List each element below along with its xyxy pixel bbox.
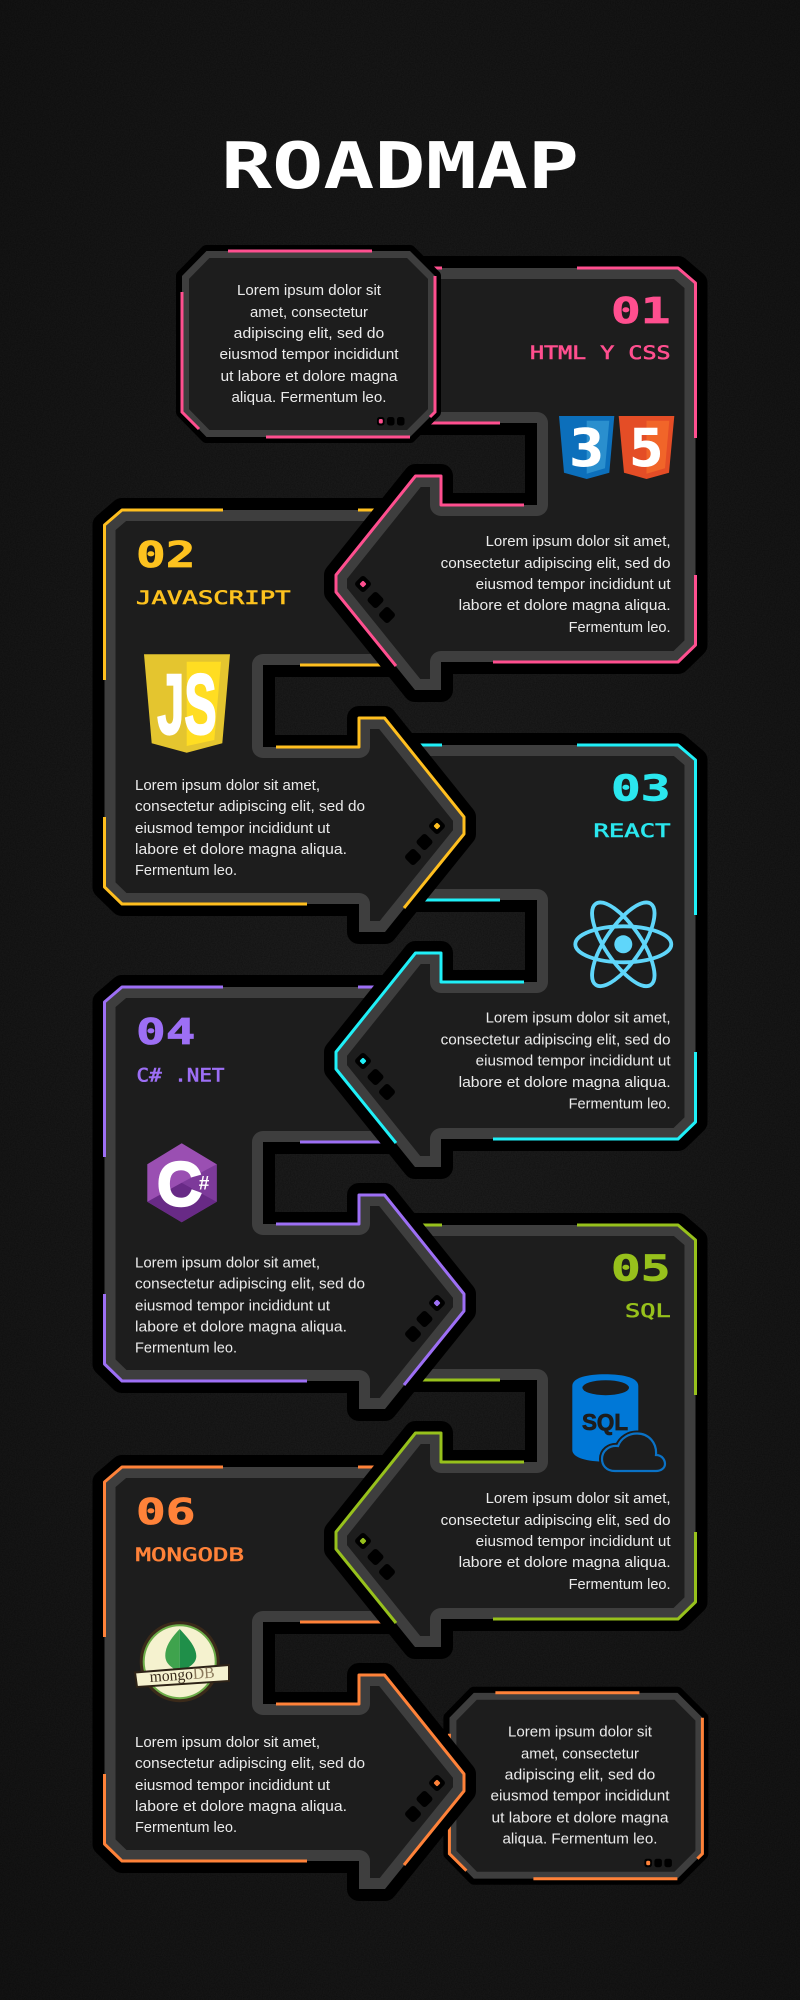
icon: JS shield: JS xyxy=(157,657,217,752)
panel 03 text: eiusmod tempor incididunt ut xyxy=(476,1052,671,1070)
icon: HTML5 shield: 5 xyxy=(629,419,664,480)
icon: HTML5 shield xyxy=(619,416,674,480)
opening card text: Lorem ipsum dolor sit xyxy=(237,282,382,299)
panel 06 text: Lorem ipsum dolor sit amet, xyxy=(135,1734,320,1751)
opening card text: eiusmod tempor incididunt xyxy=(220,346,399,363)
label SQL: SQL xyxy=(625,1301,671,1322)
panel 03: React xyxy=(336,745,696,1167)
panel 01 text: Lorem ipsum dolor sit amet, xyxy=(486,533,671,550)
panel 01 text: Fermentum leo. xyxy=(569,619,671,636)
icon: C sharp: # xyxy=(199,1174,210,1194)
icon: CSS3 shield: 3 xyxy=(569,419,604,480)
panel 02 text: Fermentum leo. xyxy=(135,862,237,879)
number 01: 01 xyxy=(611,291,670,332)
opening card text: ut labore et dolore magna xyxy=(220,368,398,385)
panel 06 text: Fermentum leo. xyxy=(135,1819,237,1836)
closing card text: ut labore et dolore magna xyxy=(492,1810,669,1827)
icon: C sharp xyxy=(147,1143,217,1222)
panel 02: JavaScript xyxy=(104,510,464,932)
opening card xyxy=(182,251,435,437)
icon: MongoDB: mongoDB xyxy=(149,1664,215,1686)
panel 01 text: consectetur adipiscing elit, sed do xyxy=(441,555,671,572)
opening card text: aliqua. Fermentum leo. xyxy=(232,389,386,406)
opening card text: amet, consectetur xyxy=(250,304,368,321)
icon: SQL database with cloud xyxy=(572,1374,665,1471)
panel 04: C# .NET xyxy=(104,987,464,1409)
panel 04 text: Lorem ipsum dolor sit amet, xyxy=(135,1254,320,1272)
icon: React atom xyxy=(575,894,671,995)
panel 02 text: Lorem ipsum dolor sit amet, xyxy=(135,777,320,794)
panel 06 text: consectetur adipiscing elit, sed do xyxy=(135,1755,365,1772)
label React: REACT xyxy=(594,821,670,842)
icon: C sharp: C xyxy=(157,1150,202,1220)
panel 06 text xyxy=(135,1734,365,1836)
panel 04 text xyxy=(135,1254,365,1356)
panel 02 text: eiusmod tempor incididunt ut xyxy=(135,820,331,837)
panel 03 text: Lorem ipsum dolor sit amet, xyxy=(486,1010,671,1026)
icon: SQL database with cloud: SQL xyxy=(582,1409,628,1435)
opening card text: adipiscing elit, sed do xyxy=(234,325,384,342)
label JavaScript: JAVASCRIPT xyxy=(136,588,291,609)
panel 02 text xyxy=(135,777,365,879)
number 03: 03 xyxy=(611,769,670,810)
panel 04 text: eiusmod tempor incididunt ut xyxy=(135,1298,331,1314)
closing card text xyxy=(490,1724,670,1848)
panel 02 text: consectetur adipiscing elit, sed do xyxy=(135,798,365,815)
closing card text: amet, consectetur xyxy=(521,1746,639,1763)
label MongoDB: MONGODB xyxy=(136,1545,244,1566)
panel 05 text: consectetur adipiscing elit, sed do xyxy=(441,1512,671,1529)
panel 04 text: consectetur adipiscing elit, sed do xyxy=(135,1276,365,1292)
number 05: 05 xyxy=(611,1249,670,1290)
panel 05 text: eiusmod tempor incididunt ut xyxy=(476,1533,671,1550)
panel 06: MongoDB xyxy=(104,1467,464,1889)
closing card text: Lorem ipsum dolor sit xyxy=(508,1724,653,1741)
panel 03 text: labore et dolore magna aliqua. xyxy=(459,1074,671,1091)
label HTML y CSS: HTML Y CSS xyxy=(530,343,671,364)
panel 02 text: labore et dolore magna aliqua. xyxy=(135,841,347,858)
panel 01 text: labore et dolore magna aliqua. xyxy=(459,597,671,614)
panel 01 text xyxy=(441,533,671,636)
panel 04 text: labore et dolore magna aliqua. xyxy=(135,1318,347,1336)
panel 06 text: labore et dolore magna aliqua. xyxy=(135,1798,347,1815)
panel 05: SQL xyxy=(336,1225,696,1647)
closing card text: adipiscing elit, sed do xyxy=(505,1767,655,1784)
panel 04 text: Fermentum leo. xyxy=(135,1340,237,1356)
panel 05 text xyxy=(441,1490,671,1593)
closing card text: aliqua. Fermentum leo. xyxy=(502,1831,658,1848)
number 06: 06 xyxy=(136,1492,196,1533)
closing card text: eiusmod tempor incididunt xyxy=(490,1788,670,1805)
label C# .NET: C# .NET xyxy=(136,1066,224,1086)
panel 05 text: labore et dolore magna aliqua. xyxy=(459,1554,671,1571)
panel 03 text xyxy=(441,1010,671,1112)
icon: MongoDB xyxy=(135,1621,229,1702)
icon: JS shield xyxy=(144,654,230,753)
number 02: 02 xyxy=(136,535,196,576)
icon: CSS3 shield xyxy=(559,416,614,480)
closing card xyxy=(449,1693,702,1879)
title: ROADMAP xyxy=(221,129,579,204)
panel 05 text: Lorem ipsum dolor sit amet, xyxy=(486,1490,671,1507)
panel 06 text: eiusmod tempor incididunt ut xyxy=(135,1777,331,1794)
panel 03 text: consectetur adipiscing elit, sed do xyxy=(441,1032,671,1048)
opening card text xyxy=(220,282,399,406)
panel 01 text: eiusmod tempor incididunt ut xyxy=(476,576,671,593)
panel 05 text: Fermentum leo. xyxy=(569,1576,671,1593)
panel 03 text: Fermentum leo. xyxy=(569,1096,671,1112)
number 04: 04 xyxy=(136,1012,196,1053)
panel 01: HTML y CSS xyxy=(336,268,696,690)
